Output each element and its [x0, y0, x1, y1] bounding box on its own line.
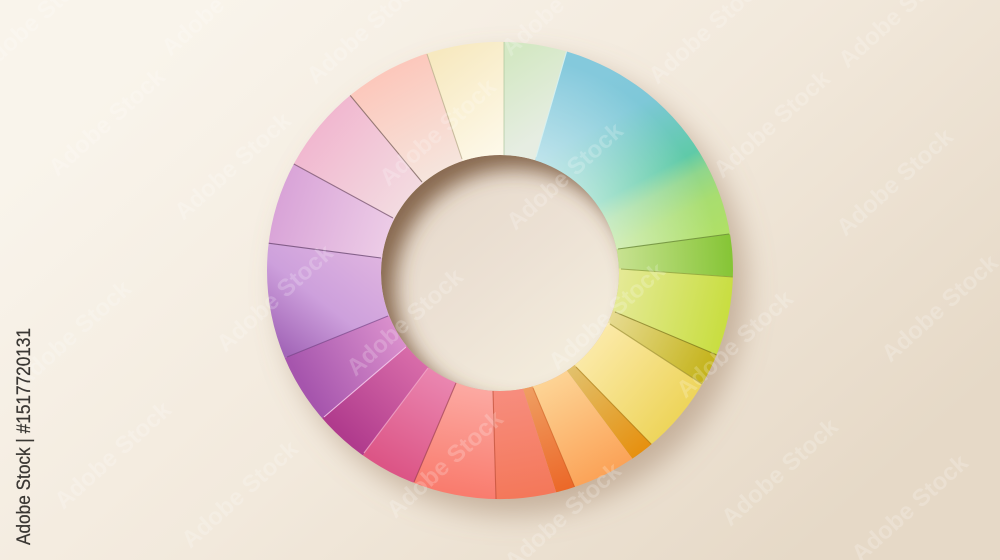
watermark pattern: Adobe Stock [169, 107, 297, 226]
segment: light pink [294, 96, 423, 219]
vertical credit text: Adobe Stock | #1517720131 [14, 328, 35, 545]
segment: mauve [268, 164, 394, 258]
segment: salmon [414, 382, 496, 499]
watermark pattern: Adobe Stock [176, 435, 304, 554]
segment: purple [267, 244, 389, 358]
watermark pattern: Adobe Stock [49, 396, 177, 515]
watermark pattern: Adobe Stock [831, 123, 959, 242]
watermark pattern: Adobe Stock [381, 405, 509, 524]
watermark pattern: Adobe Stock [876, 249, 1000, 368]
segment: pale green [504, 42, 566, 160]
segment: lime [612, 268, 733, 354]
watermark pattern: Adobe Stock [716, 413, 844, 532]
center hole [381, 155, 619, 391]
watermark pattern: Adobe Stock [43, 63, 171, 182]
watermark pattern: Adobe Stock [501, 117, 629, 236]
segment: peach [350, 54, 462, 183]
segment: cream [426, 42, 504, 161]
segment: dark orange [523, 386, 575, 492]
segment: olive [608, 310, 716, 384]
watermark pattern: Adobe Stock [708, 65, 836, 184]
segment: large blue-green [535, 52, 730, 250]
segment: pink [362, 368, 456, 482]
watermark pattern: Adobe Stock [341, 263, 469, 382]
segment: violet [284, 316, 406, 418]
segment: yellow [574, 322, 702, 444]
watermark pattern: Adobe Stock [9, 275, 137, 394]
segment: orange [533, 370, 632, 487]
watermark pattern: Adobe Stock [211, 239, 339, 358]
segment: amber [567, 365, 652, 458]
watermark pattern: Adobe Stock [543, 257, 671, 376]
watermark pattern: Adobe Stock [671, 285, 799, 404]
donut colour wheel [267, 42, 733, 500]
segment: magenta [322, 346, 428, 456]
segment: coral [492, 388, 556, 500]
wheel drop shadow [280, 58, 746, 514]
watermark pattern: Adobe Stock [374, 73, 502, 192]
segment: green [616, 234, 733, 276]
